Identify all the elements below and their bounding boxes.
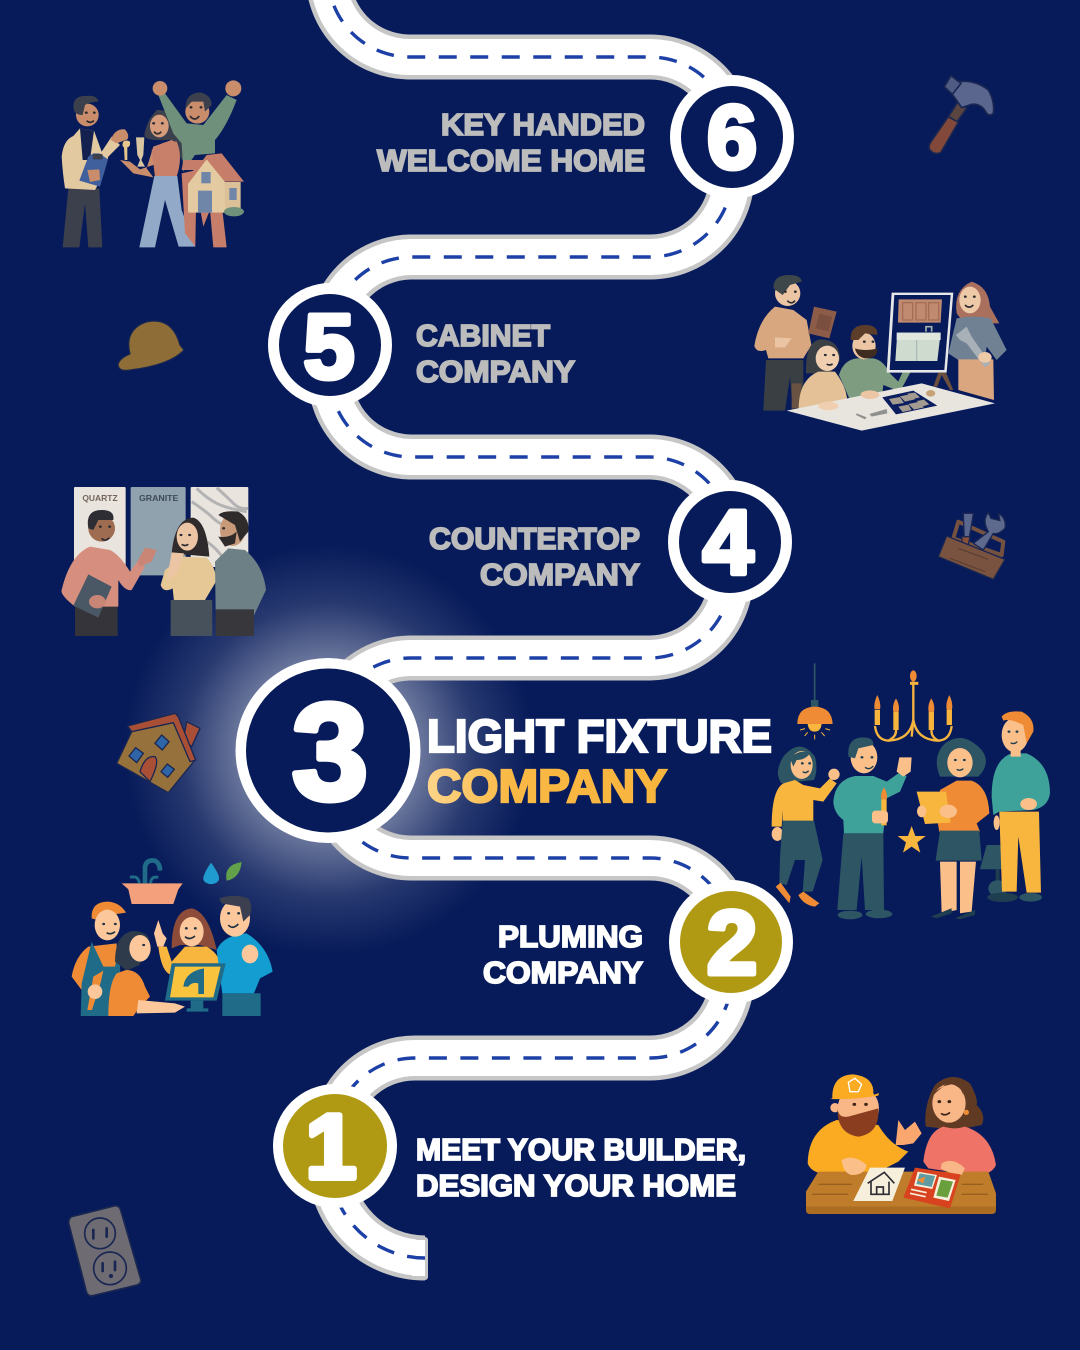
step 2 label: PLUMING (498, 919, 643, 954)
icon: house (117, 713, 200, 793)
badge 5: 5 (303, 296, 355, 398)
step 2 label (483, 919, 643, 990)
step 4 label: COUNTERTOP (429, 521, 640, 556)
illustration: countertop samples: GRANITE (139, 493, 179, 503)
illustration: builder meeting client (806, 1074, 996, 1214)
winding road (328, 0, 732, 1280)
step 3 label (427, 710, 772, 812)
step 6 label: WELCOME HOME (377, 143, 645, 178)
step 4 label: COMPANY (480, 557, 640, 592)
badge 2: 2 (707, 893, 757, 994)
step 1 label (416, 1132, 746, 1203)
step 5 label: COMPANY (416, 354, 575, 389)
badge 1: 1 (306, 1097, 356, 1198)
illustration: light fixture team (772, 663, 1050, 919)
step 3 highlighted (236, 658, 772, 843)
step 5 (268, 283, 575, 407)
step 3 label: COMPANY (427, 760, 667, 812)
step 1 label: MEET YOUR BUILDER, (416, 1132, 746, 1167)
step 6 label (377, 107, 645, 178)
badge 6: 6 (707, 88, 757, 188)
step 1 (273, 1084, 746, 1208)
step 4 (429, 480, 792, 604)
step 5 label: CABINET (416, 318, 550, 353)
badge 4 (668, 480, 792, 604)
illustration: cabinet design team (754, 275, 1007, 431)
glow behind step 3 (124, 545, 534, 955)
badge 3: 3 (292, 676, 368, 829)
badge 4: 4 (703, 493, 754, 594)
illustration: countertop samples: QUARTZ (82, 493, 118, 503)
badge 2 (669, 880, 793, 1004)
badge 3 (236, 658, 420, 843)
step 1 label: DESIGN YOUR HOME (416, 1168, 736, 1203)
icon: wall outlet (69, 1206, 141, 1296)
icon: toolbox (938, 513, 1005, 579)
step 4 label (429, 521, 640, 592)
step 6 label: KEY HANDED (441, 107, 645, 142)
badge 6 (670, 75, 794, 199)
illustration: keys handed over (62, 80, 244, 247)
illustration: plumbing team (72, 860, 273, 1016)
badge 5 (268, 283, 392, 407)
step 2 (483, 880, 793, 1004)
step 3 label: LIGHT FIXTURE (427, 710, 772, 762)
badge 1 (273, 1084, 397, 1208)
icon: hammer (929, 76, 994, 154)
step 5 label (416, 318, 575, 389)
icon: hard hat (118, 321, 184, 370)
step 6 (377, 75, 794, 199)
step 2 label: COMPANY (483, 955, 643, 990)
chandelier (875, 682, 952, 741)
illustration: countertop samples (61, 487, 266, 636)
